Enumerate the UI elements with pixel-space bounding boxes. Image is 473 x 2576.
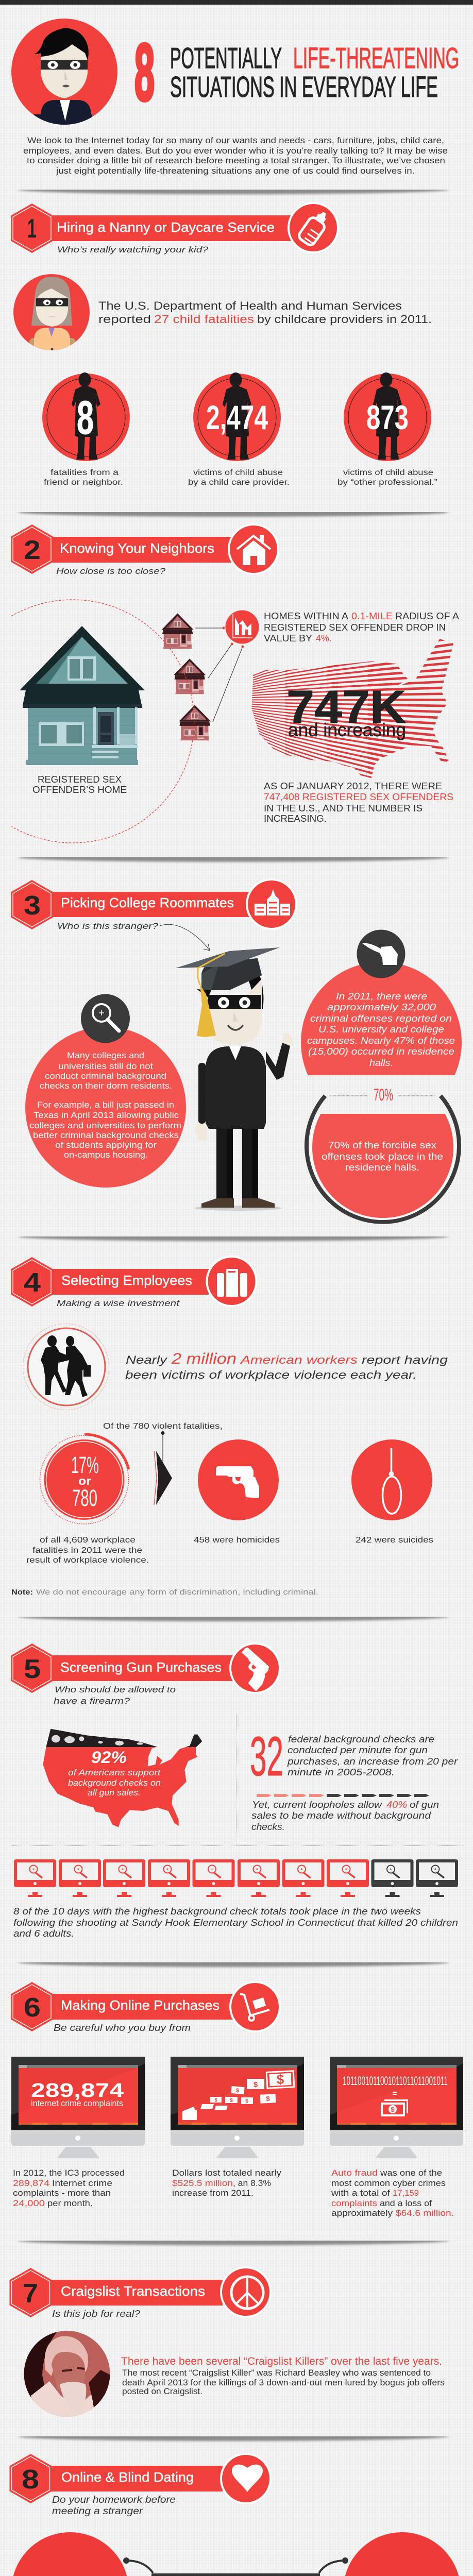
map: 92 percent support background checks: of Americans support (68, 1768, 161, 1777)
stat: 8 fatalities: 8 (77, 392, 94, 444)
stat: 2,474 victims: victims of child abuse (193, 468, 283, 477)
section 8 header: Online & Blind Dating (61, 2469, 194, 2485)
monitor: dollars flying from wallet: $ (230, 2098, 233, 2104)
map: striped US with 747K: 747K (286, 682, 406, 733)
map: 92 percent support background checks: 92% (91, 1748, 127, 1767)
icon: workplace confrontation (23, 1324, 109, 1410)
text: 2 million workers: 2 million (171, 1350, 236, 1367)
center monitor: dating profile (151, 2573, 320, 2576)
caption: auto fraud: and a loss of (380, 2198, 432, 2208)
icon: knife in hand (357, 929, 405, 978)
section 6 header: Be careful who you buy from (54, 2023, 191, 2033)
text: 2 million workers: Nearly (126, 1353, 168, 1366)
icon: college building (255, 889, 290, 916)
stat: 17 percent or 780: 780 (72, 1485, 97, 1511)
text: home value drop: 4%. (316, 633, 332, 643)
stat: 458 homicides: 458 were homicides (194, 1536, 280, 1545)
callout: campus offenses: (15,000) occurred in residence (308, 1046, 454, 1057)
illustration: registered sex offender's home (20, 626, 145, 795)
caption: IC3 complaints: In 2012, the IC3 processed (13, 2168, 125, 2178)
caption: auto fraud: with a total of (331, 2188, 390, 2198)
callout: background checks: checks on their dorm residents. (40, 1081, 172, 1091)
stat: 17 percent or 780: 17% (71, 1452, 99, 1478)
text: child fatalities statement: reported (98, 313, 151, 326)
monitor: dollars flying from wallet: $ (266, 2095, 270, 2103)
caption: auto fraud: was one of the (380, 2168, 442, 2178)
title (134, 28, 459, 117)
map: 92 percent support background checks: background checks on (68, 1778, 161, 1788)
monitor: dollars flying from wallet: $ (236, 2088, 239, 2094)
gauge: 70 percent in residence halls (307, 1075, 459, 1222)
section 6 header: 6 (24, 1993, 41, 2023)
caption: auto fraud: complaints (331, 2198, 377, 2208)
text: home value drop: REGISTERED SEX OFFENDER DROP IN (264, 622, 446, 633)
text: Craigslist killers: There have been several “Craigslist Killers” over the last five years. (121, 2355, 442, 2367)
section 6 header (11, 1981, 281, 2033)
stat: 873 victims: by “other professional.” (337, 478, 437, 487)
icon: suitcase (217, 1269, 247, 1297)
caption: auto fraud: Auto fraud (331, 2168, 378, 2178)
section 1 header: 1 (27, 214, 37, 244)
stat: 2,474 victims: by a child care provider. (188, 478, 290, 487)
icon: pistol (229, 1647, 274, 1691)
illustration: registered sex offender's home: REGISTERED SEX (38, 774, 122, 785)
stat: 2,474 victims: 2,474 (206, 398, 268, 436)
section 3 header: Picking College Roommates (61, 895, 234, 910)
callout: background checks: colleges and universities to perform (29, 1121, 181, 1130)
stat: 2,474 victims (188, 372, 290, 487)
title: POTENTIALLY (170, 42, 282, 75)
caption: IC3 complaints: complaints - more than (13, 2188, 111, 2198)
text: home value drop: HOMES WITHIN A (264, 611, 348, 621)
stat: 8 fatalities: friend or neighbor. (44, 478, 123, 487)
intro paragraph: We look to the Internet today for so many of our wants and needs - cars, furniture, jobs, child care, (27, 135, 444, 145)
section 7 header: Craigslist Transactions (61, 2283, 205, 2299)
photo: Richard Beasley (duotone) (24, 2331, 111, 2421)
caption: auto fraud: $64.6 million. (396, 2208, 454, 2218)
stat: 17 percent or 780: fatalities in 2011 were the (32, 1546, 142, 1555)
note: We do not encourage any form of discrimination, including criminal. (36, 1588, 318, 1597)
text: child fatalities statement: The U.S. Department of Health and Human Services (98, 299, 402, 312)
icon: house (237, 535, 271, 565)
caption: auto fraud: 17,159 (393, 2188, 419, 2198)
section 8 header: 8 (22, 2465, 39, 2495)
section 1 header: Who’s really watching your kid? (57, 245, 209, 255)
stat: 873 victims (337, 372, 437, 487)
callout: of the 780 violent fatalities: Of the 780 violent fatalities, (103, 1422, 223, 1431)
icon: value drop chart (226, 610, 259, 644)
text: Craigslist killers: posted on Craigslist. (122, 2386, 202, 2396)
text: Sandy Hook: following the shooting at Sandy Hook Elementary School in Connecticut that killed 20 children (13, 1918, 458, 1928)
section 5 header: 5 (24, 1654, 41, 1684)
gauge: 70 percent in residence halls: residence halls. (345, 1162, 419, 1173)
dashed radius arc (11, 600, 194, 843)
section 3 header: 3 (24, 891, 41, 921)
callout: background checks: universities still do not (58, 1061, 153, 1071)
caption: auto fraud (331, 2168, 454, 2218)
monitor: binary equals cash (330, 2057, 463, 2158)
monitor: dollars flying from wallet: $ (254, 2080, 258, 2089)
map: 92 percent support background checks: all gun sales. (88, 1788, 141, 1798)
text: loopholes: sales to be made without background (251, 1810, 431, 1821)
caption: dollars lost: increase from 2011. (172, 2188, 254, 2198)
section 8 header (9, 2453, 272, 2517)
intro paragraph: employees, and even dates. But do you ever wonder who it is you’re really talking to? It may be wise (23, 146, 448, 156)
stat: 32 checks per minute (250, 1725, 458, 1787)
caption: dollars lost: $525.5 million (172, 2178, 233, 2188)
stat: 242 suicides: 242 were suicides (356, 1536, 433, 1545)
text: home value drop: 0.1-MILE (351, 611, 393, 621)
section 2 header: Knowing Your Neighbors (60, 540, 214, 556)
callout: campus offenses: criminal offenses reported on (310, 1013, 452, 1024)
callout: background checks: of students applying for (55, 1140, 157, 1150)
stat: 32 checks per minute: federal background checks are (288, 1734, 434, 1744)
stat: 458 homicides (194, 1439, 280, 1545)
caption: dollars lost (172, 2168, 282, 2198)
monitor: dollars flying from wallet: $ (214, 2097, 217, 2103)
icon: baby bottle (297, 208, 332, 247)
text: Craigslist killers: death April 2013 for the killings of 3 down-and-out men lured by bogus job offers (122, 2378, 445, 2387)
section 3 header: Who is this stranger? (57, 921, 159, 931)
illustration: registered sex offender's home: OFFENDER’S HOME (32, 785, 127, 795)
intro paragraph (23, 135, 448, 176)
callout: background checks: better criminal background checks (33, 1130, 179, 1140)
connector lines (195, 626, 244, 722)
monitor: internet crime complaints: 289,874 (31, 2080, 124, 2102)
icon: bullets 40 percent (257, 1794, 429, 1797)
monitor: internet crime complaints: internet crime complaints (31, 2098, 123, 2108)
icon: cash stack (381, 2099, 408, 2116)
text: registered offenders count: IN THE U.S., AND THE NUMBER IS (264, 803, 423, 814)
arrow: chevron (154, 1451, 172, 1505)
text: registered offenders count (264, 781, 453, 824)
text: Craigslist killers: The most recent “Craigslist Killer” was Richard Beasley who was sentenced to (122, 2368, 431, 2378)
section 1 header: Hiring a Nanny or Daycare Service (57, 219, 275, 235)
section 6 header: Making Online Purchases (61, 1997, 219, 2013)
top bar (0, 0, 473, 5)
map: striped US with 747K (251, 639, 453, 778)
section 4 header (11, 1256, 258, 1308)
section 5 header: Screening Gun Purchases (60, 1659, 222, 1675)
callout: campus offenses: In 2011, there were (336, 991, 427, 1002)
bubble: 40 million Americans (11, 2532, 129, 2576)
text: home value drop: RADIUS OF A (395, 611, 459, 621)
text: 2 million workers: report having (362, 1353, 448, 1366)
section 4 header: Selecting Employees (61, 1273, 192, 1288)
stat: 8 fatalities (42, 372, 130, 487)
caption: auto fraud: most common cyber crimes (331, 2178, 446, 2188)
section 4 header: Making a wise investment (57, 1298, 180, 1308)
callout: campus offenses (301, 929, 462, 1075)
text: child fatalities statement: by childcare providers in 2011. (257, 313, 432, 326)
gauge: 70 percent in residence halls: offenses took place in the (322, 1151, 443, 1162)
section 7 header: Is this job for real? (52, 2309, 140, 2319)
text: Sandy Hook (13, 1906, 458, 1939)
text: 2 million workers: American workers (239, 1353, 358, 1366)
caption: auto fraud: approximately (331, 2208, 393, 2218)
caption: dollars lost: Dollars lost totaled nearly (172, 2168, 282, 2178)
text: child fatalities statement (98, 299, 432, 326)
icon: cash stack: $ (391, 2106, 395, 2113)
caption: dollars lost: , an 8.3% (233, 2178, 271, 2188)
stat: 17 percent or 780: result of workplace violence. (26, 1556, 149, 1565)
stat: 32 checks per minute: conducted per minute for gun (288, 1745, 428, 1755)
text: registered offenders count: INCREASING. (264, 814, 327, 824)
stat: 32 checks per minute: purchases, an increase from 20 per (287, 1756, 458, 1767)
monitor: dollars flying from wallet: $ (277, 2072, 284, 2087)
stat: 873 victims: 873 (366, 398, 409, 436)
section 7 header: 7 (23, 2279, 38, 2309)
text: loopholes: 40% (386, 1800, 407, 1810)
section 2 header: How close is too close? (56, 566, 166, 576)
section 8 header: Do your homework before (52, 2495, 176, 2505)
bubble: 10 percent of sex offenders (343, 2532, 461, 2576)
text: loopholes: checks. (251, 1822, 285, 1832)
text: home value drop: VALUE BY (264, 633, 312, 643)
arrow: stranger pointer (160, 924, 210, 951)
text: home value drop (264, 611, 459, 643)
callout: background checks: on-campus housing. (64, 1150, 148, 1160)
text: 2 million workers (125, 1350, 448, 1381)
caption: IC3 complaints (13, 2168, 125, 2208)
section 3 header (11, 878, 297, 931)
gauge: 70 percent in residence halls: 70% of the forcible sex (328, 1140, 436, 1150)
text: 2 million workers: been victims of workplace violence each year. (125, 1368, 417, 1381)
section 5 header: Who should be allowed to (55, 1685, 176, 1694)
section 2 header: 2 (24, 535, 41, 565)
section 7 header (9, 2266, 272, 2319)
section 2 header (11, 523, 279, 576)
gauge: 70 percent in residence halls: 70% (374, 1086, 393, 1104)
stat: 32 checks per minute: minute in 2005-2008. (288, 1767, 395, 1777)
callout: background checks: Many colleges and (67, 1050, 144, 1060)
stat: 17 percent or 780: of all 4,609 workplace (40, 1536, 136, 1545)
section 1 header (11, 202, 339, 255)
icon: peace sign (231, 2277, 263, 2309)
icon row: ten monitors (14, 1859, 458, 1897)
icon: hand truck (240, 1994, 269, 2021)
section 5 header (11, 1642, 281, 1706)
icon: masked woman portrait (13, 274, 90, 350)
connectors to monitor (124, 2558, 347, 2576)
caption: IC3 complaints: per month. (47, 2198, 93, 2208)
intro paragraph: to consider doing a little bit of research before meeting a total stranger. To illustrate, we’ve chosen (27, 156, 445, 165)
monitor: internet crime complaints (11, 2057, 145, 2158)
text: loopholes: of gun (410, 1800, 439, 1810)
stat: 17 percent or 780 (26, 1434, 149, 1565)
callout: background checks: Texas in April 2013 allowing public (33, 1110, 179, 1120)
icon: masked man portrait (11, 19, 117, 125)
callout: campus offenses: U.S. university and college (318, 1024, 444, 1035)
caption: IC3 complaints: Internet crime (52, 2178, 112, 2188)
illustration: masked graduate (176, 947, 293, 1211)
stat: 32 checks per minute: 32 (250, 1725, 283, 1787)
text: Sandy Hook: and 6 adults. (13, 1928, 74, 1939)
stat: 17 percent or 780: or (78, 1475, 91, 1487)
text: loopholes: Yet, current loopholes allow (252, 1800, 382, 1810)
intro paragraph: just eight potentially life-threatening situations any one of us could find ourselves in. (56, 166, 415, 176)
callout: background checks (25, 994, 186, 1188)
text: Craigslist killers (121, 2355, 445, 2396)
stat: 873 victims: victims of child abuse (343, 468, 433, 477)
icon: heart (232, 2465, 263, 2492)
section 5 header: have a firearm? (54, 1696, 130, 1706)
callout: campus offenses: halls. (369, 1058, 393, 1068)
text: Sandy Hook: 8 of the 10 days with the highest background check totals took place in the two weeks (13, 1906, 421, 1917)
caption: IC3 complaints: 24,000 (13, 2198, 45, 2208)
text: child fatalities statement: 27 child fatalities (154, 313, 254, 326)
callout: campus offenses: approximately 32,000 (327, 1002, 436, 1012)
title: 8 (134, 28, 155, 117)
section 4 header: 4 (24, 1268, 41, 1298)
icon: neighboring houses (162, 613, 211, 740)
map: 92 percent support background checks (43, 1729, 202, 1827)
text: registered offenders count: 747,408 REGISTERED SEX OFFENDERS (264, 792, 453, 802)
callout: background checks: For example, a bill just passed in (37, 1100, 174, 1110)
text: registered offenders count: AS OF JANUARY 2012, THERE WERE (264, 781, 442, 791)
stat: 242 suicides (351, 1439, 433, 1545)
caption: IC3 complaints: 289,874 (13, 2178, 49, 2188)
note: Note: (11, 1588, 33, 1597)
text: loopholes (251, 1800, 439, 1832)
callout: of the 780 violent fatalities (103, 1422, 223, 1462)
callout: background checks: conduct criminal background (45, 1071, 166, 1081)
section 8 header: meeting a stranger (52, 2506, 143, 2517)
icon: magnifier (81, 994, 130, 1043)
callout: campus offenses: campuses. Nearly 47% of those (307, 1036, 455, 1046)
monitor: dollars flying from wallet: $ (245, 2098, 248, 2104)
stat: 8 fatalities: fatalities from a (50, 468, 119, 477)
monitor: dollars flying from wallet (171, 2057, 304, 2158)
map: striped US with 747K: and increasing (288, 719, 406, 740)
